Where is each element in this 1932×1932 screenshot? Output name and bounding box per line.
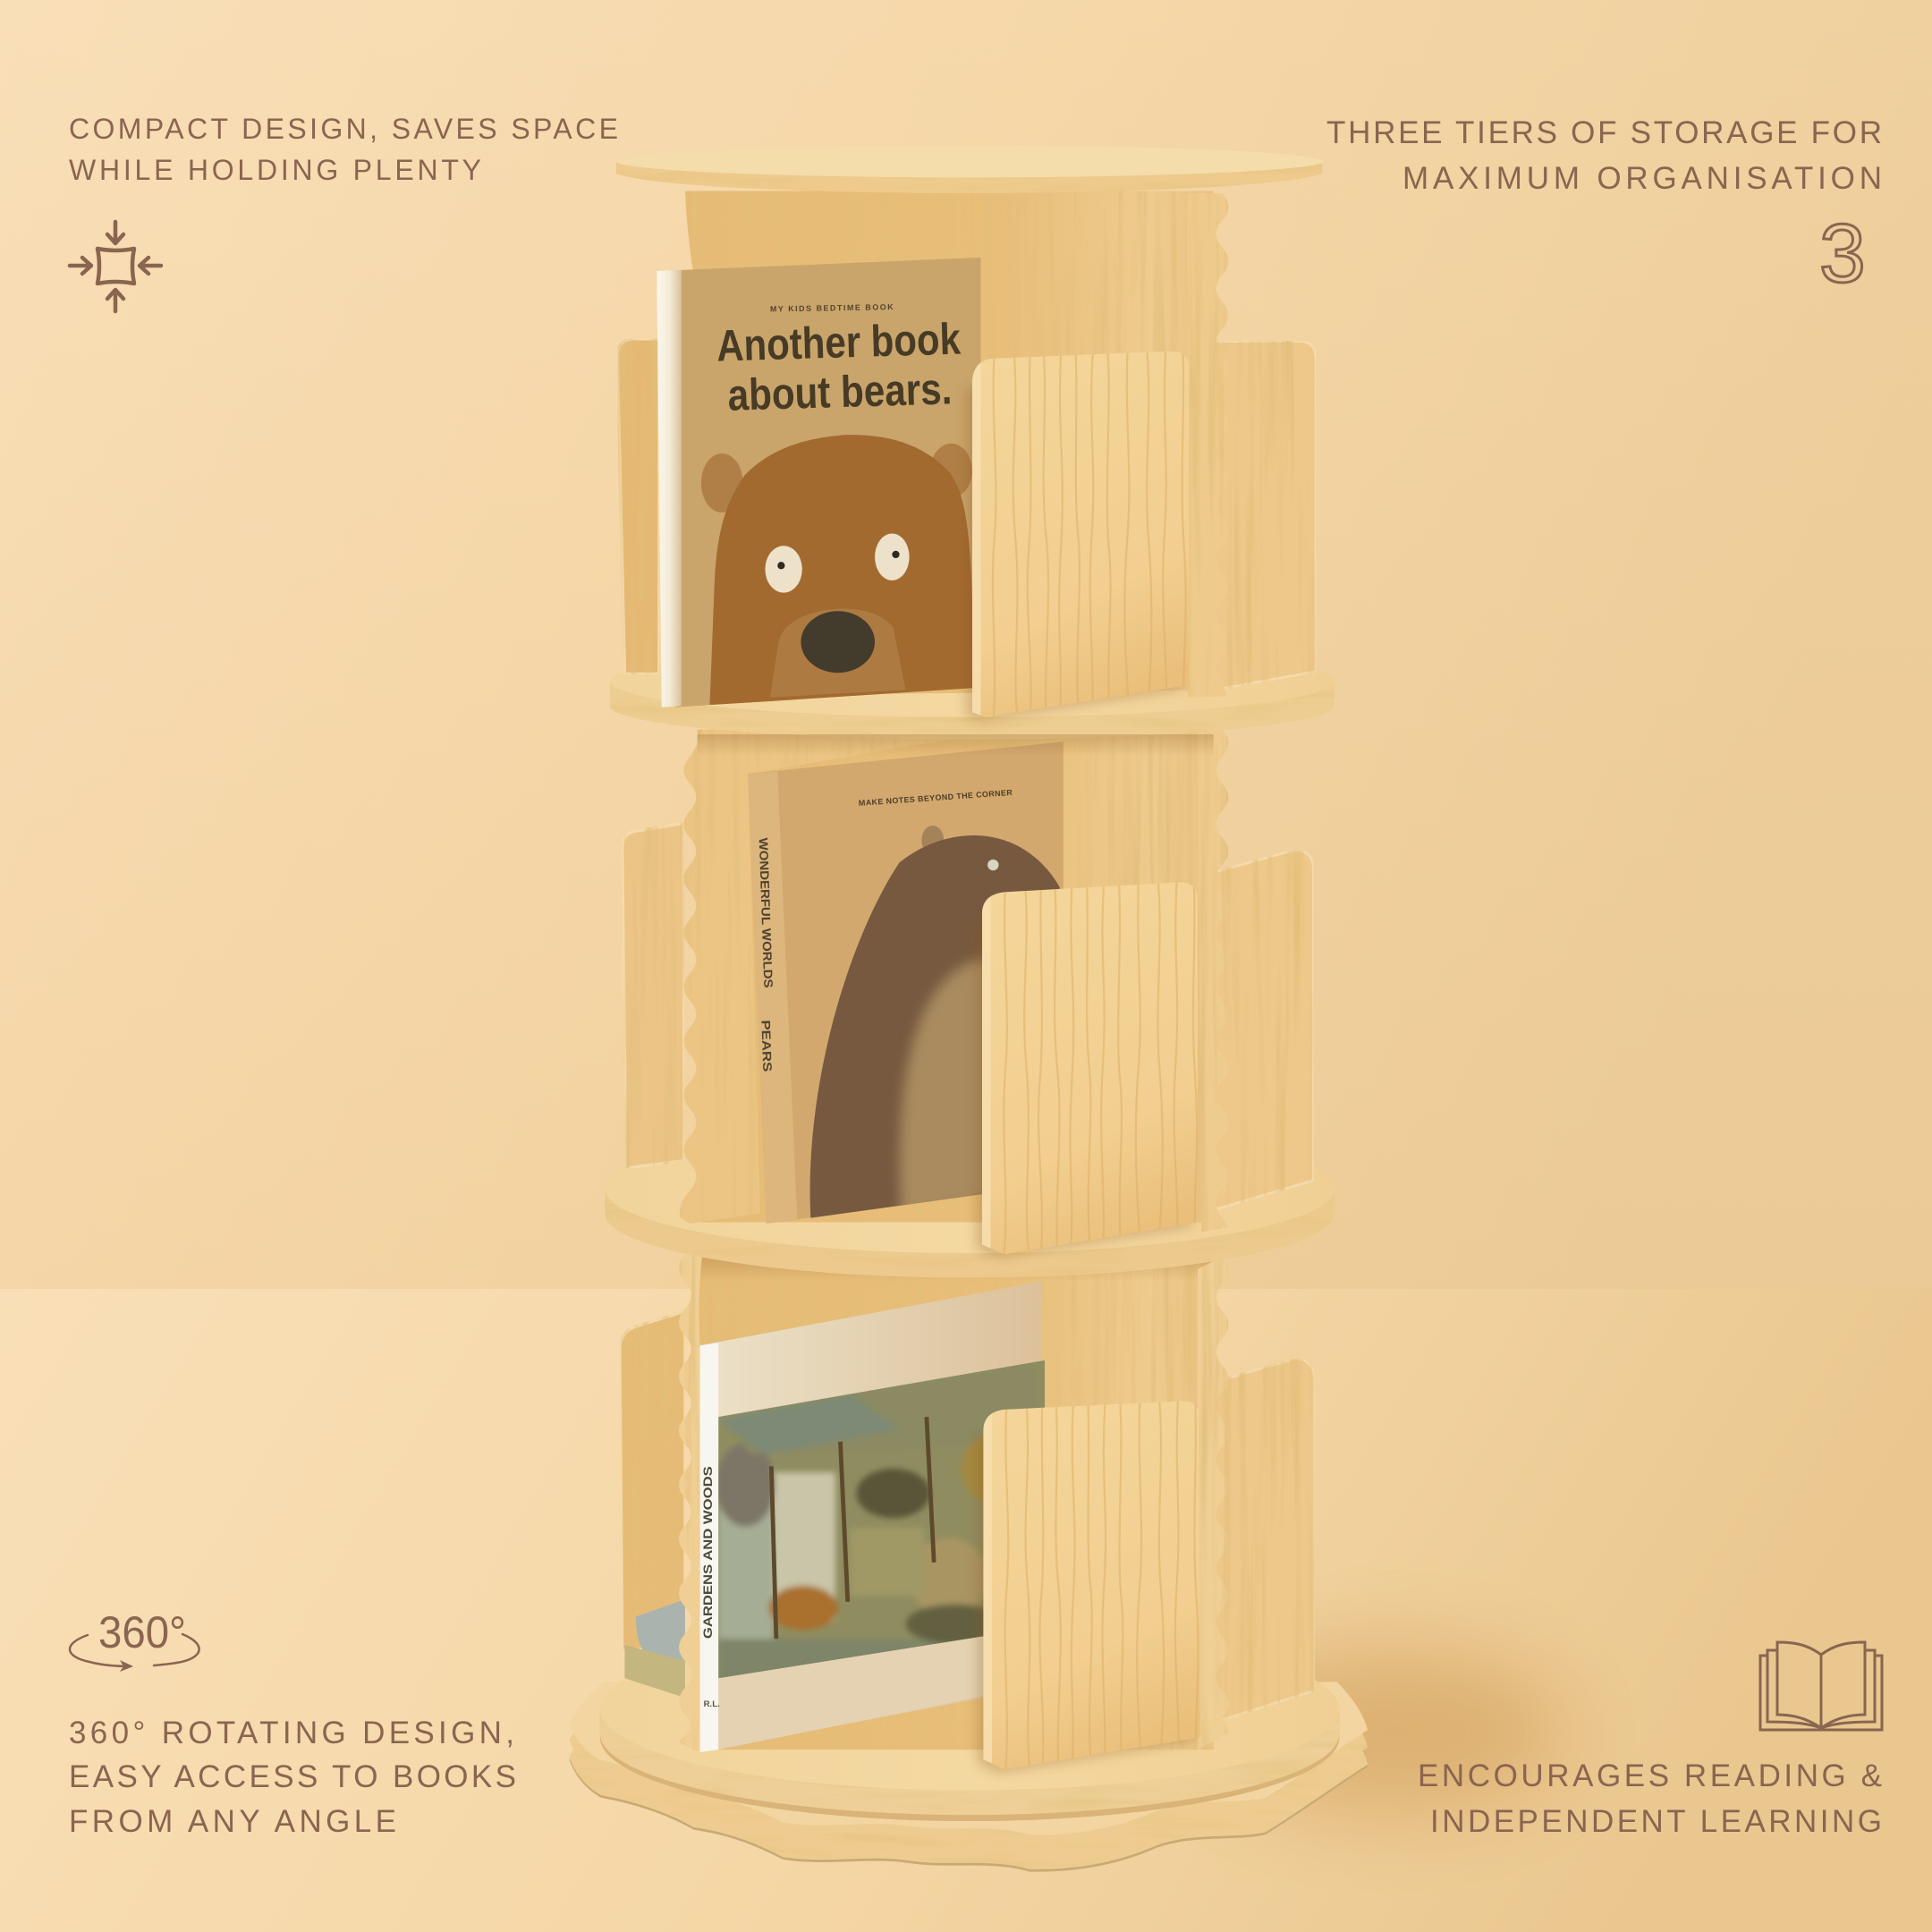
left back fin bbox=[623, 823, 684, 1168]
book title: Another book bbox=[716, 314, 962, 371]
text: 360 rotation: FROM ANY ANGLE bbox=[69, 1804, 396, 1839]
bear illustration bbox=[810, 826, 1060, 1220]
text: compact design: COMPACT DESIGN, SAVES SPACE bbox=[69, 113, 618, 145]
front fin shadow bbox=[966, 371, 1182, 721]
text: three tiers: THREE TIERS OF STORAGE FOR bbox=[1326, 115, 1882, 150]
middle shelf disc bbox=[605, 1125, 1335, 1278]
right wavy divider bbox=[1188, 193, 1228, 698]
icon: outlined number three: 3 bbox=[1819, 207, 1866, 300]
right wavy divider bbox=[1198, 730, 1228, 1233]
text: three tiers: MAXIMUM ORGANISATION bbox=[1402, 161, 1882, 196]
feature: compact design bbox=[69, 113, 618, 311]
front fin shadow bbox=[976, 903, 1191, 1258]
icon: compress arrows bbox=[70, 222, 161, 311]
wall background bbox=[0, 0, 1932, 1289]
right back fin bbox=[1214, 1359, 1315, 1723]
panel top shadow bbox=[692, 1254, 1214, 1282]
front fin bbox=[982, 882, 1198, 1254]
book header: MAKE NOTES BEYOND THE CORNER bbox=[859, 788, 1013, 808]
book spine author: R.L. bbox=[704, 1699, 720, 1709]
rotating bookshelf bbox=[569, 146, 1564, 1872]
text: compact design: WHILE HOLDING PLENTY bbox=[69, 154, 481, 186]
back panel bbox=[692, 1254, 1214, 1750]
left wavy divider bbox=[680, 730, 949, 1224]
bear book bbox=[657, 258, 981, 708]
text: 360 rotation: 360° ROTATING DESIGN, bbox=[69, 1716, 514, 1750]
tier 3: lower shelf bay bbox=[620, 1254, 1315, 1775]
icon: 360 degree rotation bbox=[70, 1607, 199, 1672]
book header: MY KIDS BEDTIME BOOK bbox=[770, 302, 894, 314]
bottom shelf disc bbox=[600, 1628, 1339, 1821]
book spine title: WONDERFUL WORLDS bbox=[757, 837, 775, 988]
panel top shadow tier 2 bbox=[698, 734, 1214, 757]
right back fin bbox=[1214, 342, 1316, 690]
bear book bbox=[748, 741, 1063, 1224]
icon: 360 degree rotation: 360° bbox=[98, 1607, 186, 1657]
book spine author: PEARS bbox=[758, 1020, 774, 1072]
book subtitle: about bears. bbox=[727, 363, 953, 420]
text: encourages reading: INDEPENDENT LEARNING bbox=[1430, 1804, 1882, 1839]
top disc bbox=[616, 146, 1323, 193]
right back fin bbox=[1214, 851, 1313, 1210]
text: three tiers bbox=[1326, 115, 1882, 196]
tier 1: upper shelf bay bbox=[617, 191, 1316, 724]
front fin bbox=[967, 345, 1195, 724]
feature: 360 rotation bbox=[69, 1607, 516, 1839]
book spine title: GARDENS AND WOODS bbox=[701, 1466, 715, 1639]
bear illustration bbox=[701, 435, 973, 705]
front fin bbox=[983, 1401, 1200, 1769]
back panel bbox=[698, 730, 1214, 1223]
icon: open book bbox=[1760, 1642, 1882, 1730]
small stacked books bbox=[624, 1599, 685, 1698]
book cover painting bbox=[716, 1360, 1045, 1688]
front fin shadow bbox=[977, 1420, 1194, 1773]
floor background bbox=[0, 1289, 1932, 1932]
upper shelf disc bbox=[610, 646, 1335, 740]
text: encourages reading bbox=[1418, 1758, 1882, 1839]
left wavy divider bbox=[678, 1254, 702, 1752]
back panel bbox=[685, 191, 1214, 696]
wall shading bbox=[0, 0, 1932, 1289]
tier 2: middle shelf bay bbox=[623, 730, 1313, 1263]
feature: encourages reading bbox=[1418, 1642, 1882, 1839]
landscape book bbox=[699, 1282, 1045, 1752]
right wavy divider bbox=[1198, 1257, 1230, 1750]
text: 360 rotation: EASY ACCESS TO BOOKS bbox=[69, 1759, 516, 1794]
left back fin bbox=[617, 339, 659, 674]
text: encourages reading: ENCOURAGES READING & bbox=[1418, 1758, 1882, 1793]
text: 360 rotation bbox=[69, 1716, 516, 1839]
feature: three tiers bbox=[1326, 115, 1882, 300]
soft shadow right of shelf bbox=[1208, 1650, 1564, 1812]
left back fin bbox=[620, 1311, 685, 1651]
text: compact design bbox=[69, 113, 618, 186]
scalloped base bbox=[569, 1682, 1368, 1872]
